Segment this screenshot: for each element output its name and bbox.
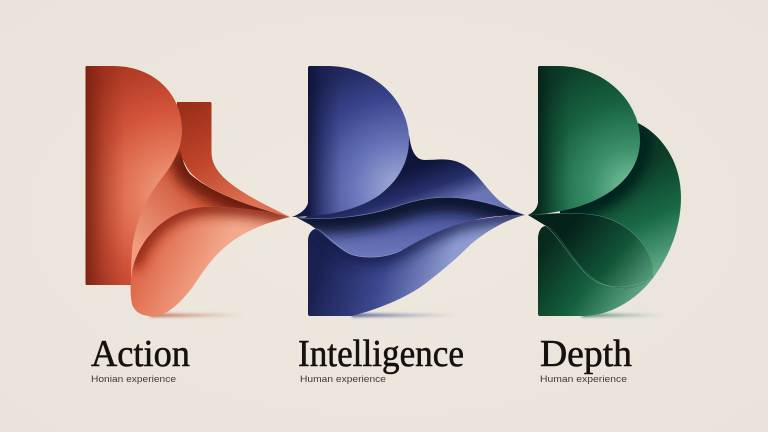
red middle fold <box>131 149 290 280</box>
heading: Action: Action <box>91 333 190 375</box>
green middle fold <box>528 213 653 289</box>
shadow: blue form <box>352 314 457 317</box>
heading: Depth: Depth <box>540 333 632 375</box>
icon: blue Intelligence ribbon form <box>290 66 530 320</box>
blue main panel <box>292 66 409 217</box>
blue main panel left shading <box>292 66 409 217</box>
caption: Action: Honian experience <box>91 374 176 385</box>
blue middle wave <box>296 197 525 258</box>
green back arc <box>560 123 681 278</box>
red main panel <box>86 66 182 285</box>
green lower base <box>538 226 653 316</box>
caption: Intelligence: Human experience <box>300 374 386 385</box>
shadow: red form <box>150 314 245 317</box>
green main panel <box>528 66 640 215</box>
heading: Intelligence: Intelligence <box>298 333 464 375</box>
red front petal <box>130 206 290 316</box>
shadow: green form <box>582 314 664 317</box>
icon: green Depth ribbon form <box>528 66 690 317</box>
blue fold highlight line <box>300 197 525 257</box>
green fold highlight line <box>530 213 653 287</box>
green main panel left shading <box>528 66 640 215</box>
caption: Depth: Human experience <box>540 374 627 385</box>
blue lower base <box>305 215 530 320</box>
blue back wave <box>300 135 518 220</box>
red main panel left shading <box>86 66 182 285</box>
red back tab <box>175 102 290 217</box>
icon: red Action ribbon form <box>86 66 295 320</box>
